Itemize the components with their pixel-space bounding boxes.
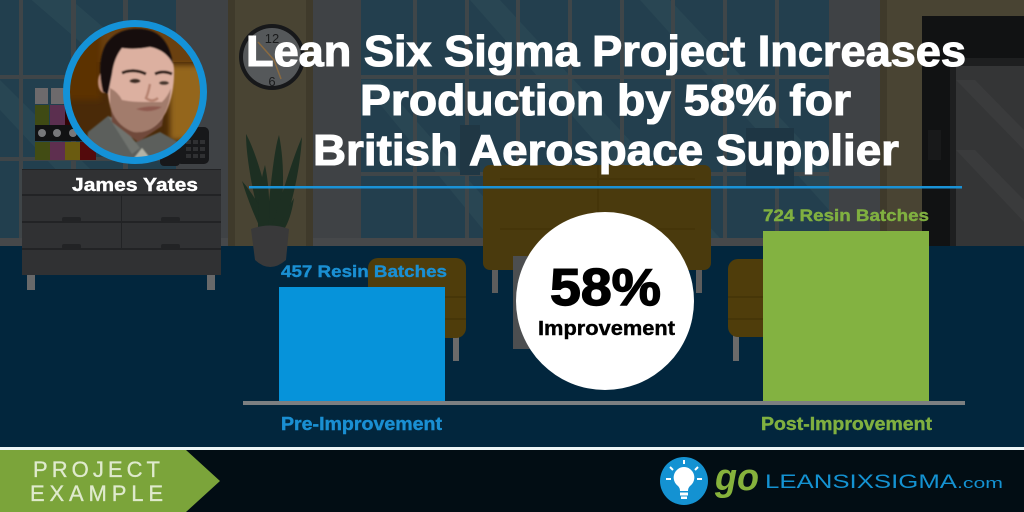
- cabinet: [22, 169, 221, 290]
- tan wall panel right: [880, 0, 1024, 246]
- desk telephone: [160, 127, 209, 166]
- logo wordmark: LEANSIXSIGMA: [765, 472, 957, 493]
- badge: project example: PROJECT: [33, 457, 160, 482]
- sofa: [483, 165, 711, 293]
- hair: [100, 29, 173, 94]
- post-improvement value label: 724 Resin Batches: [763, 206, 929, 225]
- mouth: [136, 106, 162, 111]
- icon: light bulb: [660, 457, 708, 505]
- neck: [110, 110, 164, 142]
- wall clock: 12: [265, 31, 279, 46]
- badge: project example: [0, 450, 220, 512]
- callout: 58% improvement: Improvement: [538, 318, 675, 340]
- title: [246, 27, 966, 175]
- profile photo: James Yates: [63, 20, 210, 170]
- shirt: [86, 116, 178, 157]
- title underline: [249, 186, 962, 188]
- ear: [97, 72, 106, 94]
- wall clock: 6: [268, 74, 276, 89]
- left window: [0, 0, 176, 238]
- floor: [0, 246, 1024, 448]
- centre window: [361, 0, 829, 238]
- binders on cabinet: [35, 88, 100, 160]
- back wall: [0, 0, 1024, 246]
- nose: [146, 84, 158, 100]
- logo wordmark: go: [714, 457, 759, 499]
- bar chart: [243, 206, 965, 434]
- background: office scene: [0, 0, 1024, 361]
- wall clock: [239, 24, 305, 90]
- title: British Aerospace Supplier: [313, 126, 899, 175]
- logo wordmark: .com: [957, 475, 1003, 492]
- right armchair: [728, 259, 788, 361]
- callout: 58% improvement: 58%: [550, 259, 661, 317]
- pre-improvement axis label: Pre-Improvement: [281, 414, 442, 434]
- title: Production by 58% for: [360, 76, 851, 125]
- pre-improvement value label: 457 Resin Batches: [281, 262, 447, 281]
- logo wordmark: [714, 457, 1003, 499]
- logo: GoLeanSixSigma.com: [660, 457, 1003, 505]
- chart baseline: [243, 401, 965, 405]
- post-improvement bar: [763, 231, 929, 401]
- face: [106, 38, 174, 132]
- badge: project example: EXAMPLE: [30, 481, 163, 506]
- eyes: [130, 79, 140, 83]
- elevator: [922, 16, 1024, 256]
- post-improvement axis label: Post-Improvement: [761, 414, 932, 434]
- coffee table: [513, 256, 573, 349]
- footer band: [0, 447, 1024, 512]
- eyebrows: [122, 71, 172, 74]
- stubble: [110, 88, 171, 132]
- left armchair: [368, 258, 466, 361]
- tan wall panel left: [228, 0, 313, 246]
- title: Lean Six Sigma Project Increases: [246, 27, 966, 76]
- callout: 58% improvement: [516, 212, 694, 390]
- potted plant: [242, 134, 302, 267]
- pre-improvement bar: [279, 287, 445, 401]
- name label: James Yates: [72, 174, 198, 195]
